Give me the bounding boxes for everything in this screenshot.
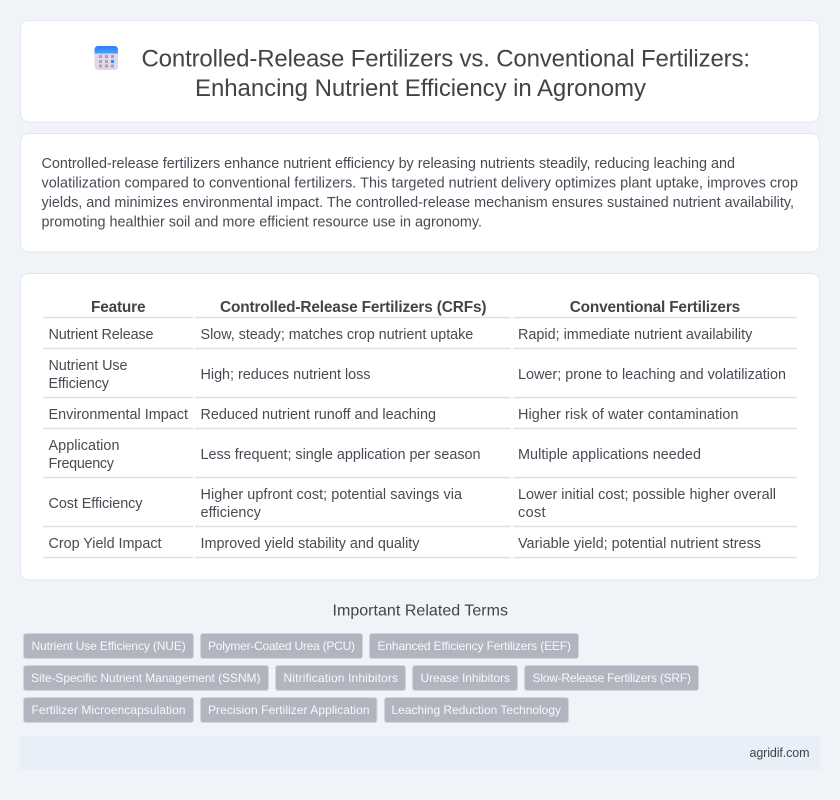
chip — [200, 634, 362, 658]
chip — [24, 698, 194, 722]
chip: Nutrient Use Efficiency (NUE) — [32, 639, 186, 653]
chip — [412, 666, 518, 690]
title — [142, 46, 750, 102]
footer — [20, 736, 820, 770]
table row: environmental impact: Environmental Impact — [48, 407, 188, 423]
title: Enhancing Nutrient Efficiency in Agronomy — [195, 75, 646, 102]
table row: crop yield impact: Crop Yield Impact — [48, 536, 162, 552]
panel: introduction — [20, 134, 820, 252]
title: Controlled-Release Fertilizers vs. Conventional Fertilizers: — [142, 46, 750, 72]
table row: crop yield impact — [48, 536, 761, 552]
table row: nutrient use efficiency: Nutrient Use — [48, 358, 128, 374]
chip — [276, 666, 406, 690]
table header row: Feature — [91, 299, 146, 316]
chip: Enhanced Efficiency Fertilizers (EEF) — [378, 639, 571, 653]
heading: important related terms: Important Related Terms — [332, 602, 508, 620]
table row: nutrient use efficiency: Efficiency — [48, 376, 110, 392]
chip: Precision Fertilizer Application — [208, 703, 370, 717]
icon: calendar — [94, 46, 118, 70]
table header row: Conventional Fertilizers — [570, 299, 740, 316]
chip: Leaching Reduction Technology — [392, 703, 561, 717]
chip: Urease Inhibitors — [420, 671, 510, 685]
table row: nutrient release: Slow, steady; matches crop nutrient uptake — [200, 327, 473, 343]
table row: crop yield impact: Improved yield stability and quality — [200, 536, 420, 552]
table header row — [91, 299, 740, 316]
chip: Polymer-Coated Urea (PCU) — [208, 639, 355, 653]
text block: introduction: promoting healthier soil and more efficient resource use in agronomy. — [42, 214, 482, 230]
panel: comparison table — [20, 274, 820, 580]
chip — [384, 698, 568, 722]
table row: cost efficiency: cost — [518, 505, 546, 521]
related terms chips — [24, 634, 698, 722]
text block: introduction: Controlled-release fertilizers enhance nutrient efficiency by releasing nutrients steadily, reducing leaching and — [42, 156, 735, 172]
text block: introduction: yields, and minimizes environmental impact. The controlled-release mechanism ensures sustained nutrient availability, — [42, 195, 794, 211]
chip — [24, 666, 268, 690]
table row: application frequency — [48, 438, 701, 472]
table row: crop yield impact: Variable yield; potential nutrient stress — [518, 536, 761, 552]
table row: cost efficiency: efficiency — [200, 505, 262, 521]
table row: environmental impact: Reduced nutrient runoff and leaching — [200, 407, 436, 423]
text block: introduction — [42, 156, 798, 230]
chip — [24, 634, 194, 658]
table row: nutrient use efficiency — [48, 358, 786, 392]
table row: nutrient release: Rapid; immediate nutrient availability — [518, 327, 753, 343]
chip: Fertilizer Microencapsulation — [32, 703, 186, 717]
text block: introduction: volatilization compared to conventional fertilizers. This targeted nutrient delivery optimizes plant uptake, improves crop — [42, 176, 798, 192]
table row: application frequency: Frequency — [48, 456, 115, 472]
table row: nutrient use efficiency: Lower; prone to leaching and volatilization — [518, 367, 786, 383]
chip: Nitrification Inhibitors — [284, 671, 398, 685]
table row: environmental impact — [48, 407, 738, 423]
footer: agridif.com — [750, 746, 810, 760]
table row: cost efficiency — [48, 487, 776, 521]
chip: Site-Specific Nutrient Management (SSNM) — [31, 671, 260, 685]
table row: nutrient use efficiency: High; reduces nutrient loss — [200, 367, 370, 383]
chip — [524, 666, 698, 690]
table row: cost efficiency: Cost Efficiency — [48, 496, 143, 512]
chip — [370, 634, 578, 658]
table header row: Controlled-Release Fertilizers (CRFs) — [220, 299, 486, 316]
table row: cost efficiency: Lower initial cost; possible higher overall — [518, 487, 776, 503]
table row: nutrient release — [48, 327, 753, 343]
chip — [200, 698, 377, 722]
table row: application frequency: Multiple applications needed — [518, 447, 701, 463]
table row: application frequency: Less frequent; single application per season — [200, 447, 480, 463]
table row: cost efficiency: Higher upfront cost; potential savings via — [200, 487, 462, 503]
table row: application frequency: Application — [48, 438, 120, 454]
panel: title header — [20, 20, 820, 122]
chip: Slow-Release Fertilizers (SRF) — [532, 671, 691, 685]
table row: environmental impact: Higher risk of water contamination — [518, 407, 738, 423]
table row: nutrient release: Nutrient Release — [48, 327, 154, 343]
